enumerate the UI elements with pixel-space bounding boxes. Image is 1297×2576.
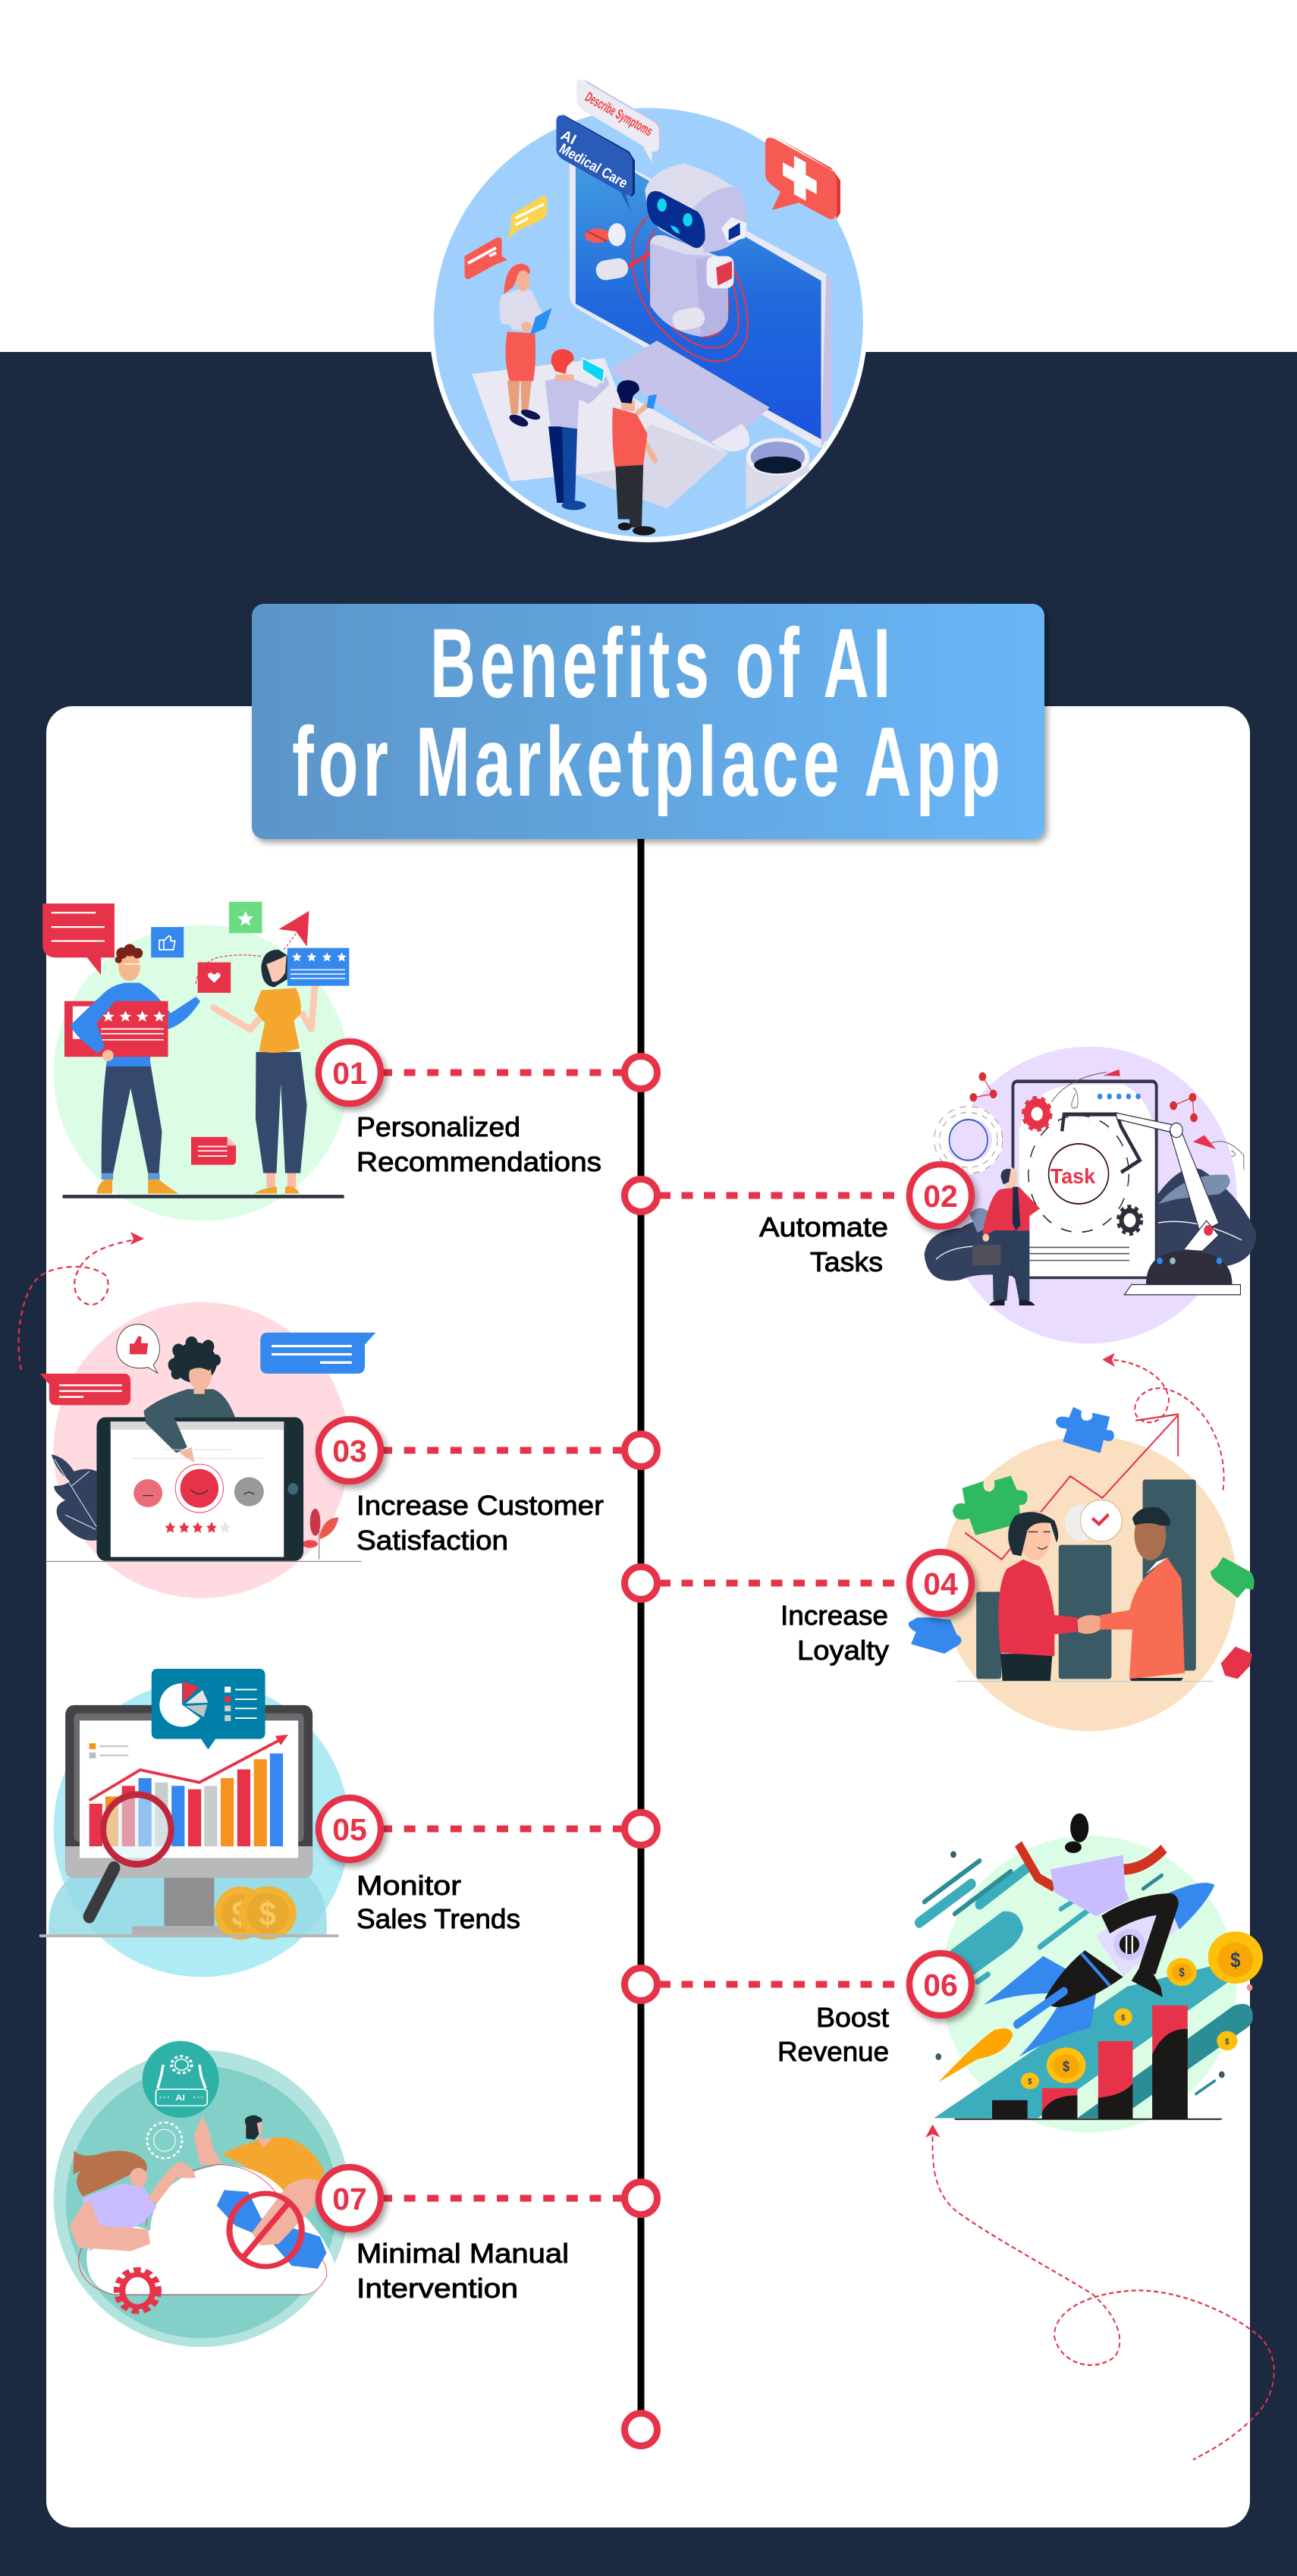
coins — [215, 1886, 297, 1940]
man with beard — [193, 2115, 325, 2193]
badge 01: 01 — [332, 1056, 367, 1091]
label 04: Increase — [780, 1600, 888, 1631]
label 05: Sales Trends — [356, 1903, 520, 1934]
badge 05 — [319, 1798, 381, 1860]
person — [143, 1337, 235, 1453]
person: man in red shirt — [612, 380, 657, 536]
blue chat bubble — [260, 1333, 375, 1374]
label 01: Recommendations — [356, 1146, 601, 1177]
dashed arrow: large loop — [925, 2125, 1274, 2460]
speech bubble: AI medical care: AI — [558, 127, 579, 148]
red chat bubble — [40, 1374, 130, 1405]
rocket — [984, 1883, 1214, 2056]
node end — [625, 2414, 657, 2446]
magnifier — [90, 1795, 171, 1917]
connectors and timeline nodes — [381, 1056, 899, 2446]
node 04 — [625, 1567, 657, 1599]
thumbs-up tile — [151, 927, 184, 957]
cloud — [78, 2165, 335, 2295]
gold coins: $ — [1121, 2013, 1126, 2023]
small gears — [1024, 1098, 1142, 1234]
panel: white content card — [46, 706, 1250, 2527]
illustration: 06 boost revenue — [919, 1814, 1274, 2460]
label 06: Revenue — [777, 2036, 889, 2067]
label 04 — [780, 1600, 889, 1666]
robot arm — [1062, 1113, 1240, 1295]
thumbs-up bubble — [117, 1324, 159, 1373]
label 05 — [356, 1870, 520, 1934]
coins: $ — [231, 1895, 249, 1932]
prohibition sign — [229, 2194, 302, 2267]
gold coins: $ — [1230, 1948, 1241, 1972]
label 02: Automate — [759, 1211, 888, 1242]
connector 06 — [659, 1981, 899, 1987]
puzzle pieces — [909, 1407, 1255, 1679]
label 01: Personalized — [356, 1111, 520, 1142]
label 06 — [777, 2002, 889, 2067]
gold coins: $ — [1028, 2077, 1032, 2087]
growth line — [965, 1414, 1178, 1560]
small note — [191, 1137, 236, 1165]
connector 05 — [381, 1825, 623, 1833]
badge 06: 06 — [923, 1968, 958, 2003]
label 02: Tasks — [810, 1246, 883, 1277]
right man — [1077, 1507, 1185, 1682]
dashed arrow: top left loop — [19, 1232, 144, 1370]
speech bubble: AI medical care: Medical Care — [556, 140, 630, 192]
trend arrow — [90, 1735, 288, 1800]
bar chart — [90, 1754, 283, 1846]
node 03 — [625, 1434, 657, 1467]
woman — [70, 2150, 196, 2251]
man — [64, 944, 200, 1193]
label 07: Minimal Manual — [356, 2238, 569, 2269]
teal streaks — [919, 1851, 1253, 2118]
label 07 — [356, 2238, 569, 2304]
node 05 — [625, 1813, 657, 1845]
blue wrench — [217, 2190, 326, 2269]
AI robot icon — [143, 2041, 219, 2118]
task label: Task — [1050, 1164, 1095, 1189]
node 07 — [625, 2182, 657, 2215]
tablet — [96, 1406, 303, 1561]
rating faces — [133, 1479, 162, 1507]
illustration: 02 automate tasks — [925, 1047, 1256, 1343]
pills — [585, 223, 626, 247]
badge 07 — [319, 2167, 381, 2229]
red comment bubble — [42, 903, 115, 975]
heart tile — [198, 963, 231, 993]
label 03: Increase Customer — [356, 1490, 604, 1521]
businessman — [972, 1167, 1040, 1305]
main task gear — [1032, 1120, 1126, 1228]
rising person — [1019, 1814, 1170, 1997]
label 03 — [356, 1490, 604, 1556]
badge 03 — [319, 1419, 381, 1481]
task document — [1013, 1073, 1157, 1277]
chat check bubbles — [1065, 1500, 1122, 1541]
paper plane — [278, 911, 309, 951]
molecule icons — [970, 1073, 1197, 1122]
bar columns — [976, 1480, 1196, 1679]
gold coins: $ — [1179, 1967, 1185, 1980]
badge 04: 04 — [923, 1566, 958, 1601]
node 02 — [625, 1179, 657, 1212]
node 06 — [625, 1968, 657, 2001]
star rating — [165, 1522, 231, 1533]
revenue bars — [955, 2006, 1222, 2119]
pie chart bubble — [152, 1669, 265, 1750]
outline gear — [937, 1110, 1000, 1170]
red plant — [302, 1509, 339, 1560]
connector 01 — [381, 1070, 623, 1076]
white outline gear — [147, 2122, 182, 2158]
gold coins — [1021, 1931, 1263, 2089]
robot — [595, 163, 748, 361]
timeline spine — [637, 839, 645, 2430]
speech bubble: AI medical care — [556, 114, 635, 212]
paper planes — [1103, 1070, 1244, 1170]
title line 1: Benefits of AI — [430, 608, 895, 718]
gold coins: $ — [1063, 2058, 1069, 2075]
red gear — [117, 2270, 158, 2311]
woman — [213, 950, 316, 1193]
label 01 — [356, 1111, 601, 1177]
label 06: Boost — [816, 2002, 889, 2033]
connector 04 — [659, 1579, 899, 1587]
coins: $ — [259, 1895, 276, 1932]
rocket flame — [938, 2028, 1013, 2082]
illustration: AI medical robot hero — [429, 78, 868, 542]
illustration: 07 minimal manual intervention — [54, 2041, 350, 2347]
badge 05: 05 — [332, 1812, 367, 1847]
badge 03: 03 — [332, 1434, 367, 1469]
illustration: 04 increase loyalty — [909, 1352, 1255, 1731]
label 03: Satisfaction — [356, 1525, 508, 1556]
connector 02 — [659, 1192, 899, 1198]
label 04: Loyalty — [797, 1635, 889, 1666]
gold coins: $ — [1225, 2037, 1229, 2047]
illustration: 01 personalized recommendations — [42, 902, 350, 1221]
small chat bubbles — [464, 196, 547, 279]
badge 02 — [909, 1164, 972, 1227]
label 02 — [759, 1211, 888, 1277]
speech bubble: medical cross — [765, 135, 840, 219]
badge 01 — [319, 1041, 381, 1104]
illustration: 03 customer satisfaction — [40, 1302, 375, 1598]
badge 06 — [909, 1953, 972, 2015]
connector 07 — [381, 2195, 623, 2201]
man's arm — [252, 2179, 320, 2246]
connector 03 — [381, 1447, 623, 1453]
blue rating card — [287, 948, 349, 986]
title box — [252, 604, 1044, 839]
person: woman with tablet — [499, 264, 552, 429]
node 01 — [625, 1056, 657, 1089]
speech bubble: describe symptoms — [576, 78, 662, 163]
monitor — [65, 1705, 312, 1936]
leaf plant — [52, 1454, 96, 1541]
star tile — [229, 902, 262, 933]
badge 04 — [909, 1552, 972, 1614]
illustration: 05 monitor sales trends — [40, 1669, 350, 1977]
person: man in blue jeans — [545, 349, 610, 510]
speech bubble: describe symptoms: Describe Symptoms — [583, 89, 656, 139]
AI robot icon: AI — [175, 2094, 185, 2103]
badge 07: 07 — [332, 2182, 367, 2216]
badge 02: 02 — [923, 1179, 958, 1214]
dark blobs — [925, 1168, 1256, 1281]
left man — [998, 1510, 1077, 1682]
dashed arrow — [1102, 1352, 1224, 1491]
label 05: Monitor — [356, 1870, 461, 1901]
label 07: Intervention — [356, 2273, 518, 2304]
